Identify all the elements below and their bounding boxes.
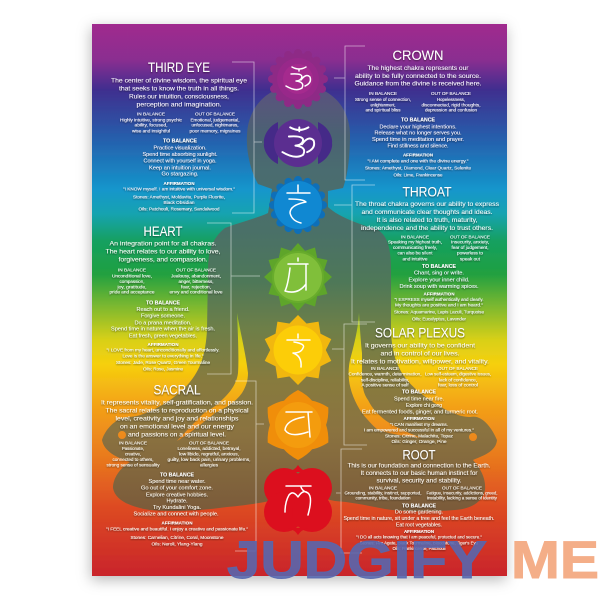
to balance: Eat fresh, green vegetables. — [129, 333, 197, 339]
out of balance: OUT OF BALANCE — [189, 440, 229, 445]
out of balance: low libido, regretful, anxious, — [179, 452, 239, 457]
in balance: strong sense of sensuality — [106, 462, 160, 467]
panel: third eye — [111, 59, 247, 212]
connector: crown bracket — [334, 46, 365, 180]
description: The heart relates to our ability to love, — [106, 249, 221, 256]
description: This is our foundation and connection to the Earth. — [348, 462, 491, 469]
out of balance: Emotional, judgemental, — [190, 117, 240, 122]
in balance — [344, 486, 422, 501]
meditating silhouette — [102, 85, 497, 511]
to balance: Release what no longer serves you. — [374, 131, 462, 137]
in balance: Strong sense of connection, — [355, 97, 411, 102]
affirmation: AFFIRMATION — [404, 529, 434, 534]
affirmation: Oils: Lime, Frankincense — [394, 173, 443, 178]
affirmation — [356, 529, 482, 551]
affirmation — [394, 292, 484, 321]
in balance: wise and insightful — [132, 128, 170, 133]
affirmation: "I KNOW myself. I am intuitive with universal wisdom." — [123, 186, 235, 191]
in balance: can also be silent — [398, 250, 433, 255]
in balance: and intuitive — [402, 256, 428, 261]
affirmation — [123, 181, 235, 212]
description: and communicate clear thoughts and ideas. — [362, 209, 493, 216]
in balance: IN BALANCE — [369, 91, 397, 96]
connector: heart bracket — [207, 223, 260, 374]
heading: root: ROOT — [402, 446, 436, 462]
affirmation: "I LOVE from my heart, unconditionally and effortlessly. — [106, 348, 220, 353]
heading: throat: THROAT — [402, 184, 452, 200]
affirmation: Stones: Carnelian, Citrine, Coral, Moonstone — [130, 535, 224, 540]
description — [101, 399, 253, 438]
to balance: Eat fermented foods, ginger, and turmeric root. — [362, 409, 478, 415]
affirmation: Stones: Jade, Rose Quartz, Green Tourmaline — [116, 360, 210, 365]
affirmation: I am empowered and successful in all of my ventures." — [364, 428, 474, 433]
in balance: enlightenment, — [370, 102, 396, 107]
to balance: Find stillness and silence. — [388, 144, 449, 150]
to balance: Go stargazing. — [162, 172, 199, 178]
description: It is also related to truth, maturity, — [376, 217, 478, 224]
connector: root bracket — [336, 449, 362, 553]
description: perception and imagination. — [136, 101, 222, 108]
affirmation: Oils: Ginger, Orange, Pine — [392, 439, 447, 444]
affirmation — [106, 342, 220, 371]
to balance — [142, 139, 218, 178]
in balance: IN BALANCE — [401, 234, 429, 239]
to balance: TO BALANCE — [401, 117, 435, 123]
affirmation: Stones: Fire Agate, Black Tourmaline, Bloodstone, Tiger's Eye — [360, 541, 478, 546]
affirmation: "I FEEL creative and beautiful. I enjoy a creative and passionate life." — [106, 526, 248, 531]
in balance: community, tribe, foundation — [356, 496, 411, 501]
description: survival, security and stability. — [376, 477, 462, 484]
out of balance — [170, 268, 223, 295]
out of balance: fear, loss of control — [438, 383, 478, 388]
in balance: ability, focused, — [134, 123, 168, 128]
to balance: Spend time near water. — [148, 479, 206, 485]
out of balance: instability, lacking a sense of identity — [427, 496, 498, 501]
to balance: Do some gardening. — [395, 510, 443, 516]
to balance — [111, 300, 215, 339]
affirmation: "I EXPRESS myself authentically and clearly. — [394, 297, 484, 302]
connector: solar plexus bracket — [332, 324, 367, 445]
out of balance: lack of confidence, — [439, 377, 477, 382]
in balance: Unconditional love, — [112, 274, 152, 279]
out of balance: Low self-esteem, digestive issues, — [425, 372, 491, 377]
to balance: TO BALANCE — [402, 389, 436, 395]
description: The highest chakra represents our — [368, 65, 469, 72]
description: It governs our ability to be confident — [365, 342, 475, 349]
to balance: Declare your highest intentions. — [380, 124, 457, 130]
to balance: Eat root vegetables. — [396, 523, 442, 529]
affirmation: Stones: Amethyst, Moldavite, Purple Fluorite, — [133, 194, 225, 199]
to balance: Practice visualization. — [154, 145, 207, 151]
description: An integration point for all chakras. — [110, 241, 217, 248]
watermark: me: ME — [511, 531, 599, 590]
to balance: Spend time in nature when the air is fresh. — [111, 327, 215, 333]
out of balance — [190, 112, 240, 133]
in balance: Confidence, warmth, determination, — [348, 372, 422, 377]
description: on an emotional level and our energy — [120, 423, 235, 430]
out of balance — [426, 486, 498, 501]
affirmation: Stones: Citrine, Malachite, Topaz — [385, 434, 454, 439]
to balance: Reach out to a friend. — [136, 307, 190, 313]
out of balance: Jealousy, abandonment, — [171, 274, 221, 279]
description: and passions on a spiritual level. — [128, 431, 226, 438]
description — [106, 241, 221, 264]
in balance: pride and acceptance — [110, 290, 155, 295]
out of balance: disconnected, rigid thoughts, — [422, 102, 480, 107]
panel: crown — [354, 47, 482, 178]
out of balance: anger, bitterness, — [178, 279, 214, 284]
affirmation: AFFIRMATION — [148, 342, 178, 347]
panel: throat — [355, 184, 499, 321]
heading: sacral: SACRAL — [154, 381, 201, 397]
description: that seeks to know the truth in all things. — [119, 85, 239, 92]
to balance — [344, 504, 495, 529]
description: forgiveness, and compassion. — [118, 257, 208, 264]
affirmation: AFFIRMATION — [162, 520, 192, 525]
in balance: creative, — [125, 452, 141, 457]
out of balance: OUT OF BALANCE — [195, 112, 235, 117]
in balance: compassion, — [120, 279, 144, 284]
affirmation: Oils: Frankincense, Patchouli — [392, 546, 446, 551]
heading: heart: HEART — [144, 223, 183, 239]
icon: heart chakra — [264, 243, 332, 311]
to balance — [400, 264, 479, 290]
in balance: communicating freely, — [393, 245, 437, 250]
out of balance: powerless to — [457, 250, 484, 255]
affirmation — [106, 520, 248, 546]
in balance — [110, 268, 155, 295]
in balance: IN BALANCE — [118, 268, 146, 273]
out of balance — [425, 366, 491, 388]
panel: heart — [106, 223, 223, 371]
to balance: Keep an intuition journal. — [149, 165, 211, 171]
to balance: Spend time in meditation and prayer. — [372, 137, 464, 143]
out of balance: depression and confusion — [425, 108, 478, 113]
to balance: TO BALANCE — [160, 472, 194, 478]
out of balance: OUT OF BALANCE — [431, 91, 471, 96]
affirmation: AFFIRMATION — [404, 416, 434, 421]
in balance: Highly intuitive, strong psychic — [120, 117, 182, 122]
out of balance: allergies — [200, 462, 218, 467]
description — [111, 77, 247, 108]
out of balance: OUT OF BALANCE — [450, 234, 490, 239]
to balance: TO BALANCE — [422, 264, 456, 270]
out of balance: OUT OF BALANCE — [438, 366, 478, 371]
description: independence and the ability to trust others. — [361, 225, 493, 232]
in balance — [355, 91, 411, 113]
in balance: Grounding, stability, instinct, supported, — [344, 491, 422, 496]
to balance: Do a prana meditation. — [134, 320, 192, 326]
out of balance: envy and conditional love — [170, 290, 223, 295]
affirmation: Love is the answer to everything in life." — [122, 353, 204, 358]
description: The throat chakra governs our ability to express — [355, 201, 499, 208]
out of balance — [168, 440, 250, 467]
description: and in control of our lives. — [380, 350, 460, 357]
out of balance — [450, 234, 490, 261]
description: Rules our intuition, consciousness, — [129, 93, 229, 100]
to balance: Drink soup with warming spices. — [400, 284, 479, 290]
affirmation: "I CAN manifest my dreams. — [390, 422, 448, 427]
to balance: Spend time in nature, sit under a tree and feel the Earth beneath. — [344, 516, 495, 522]
icon: sacral chakra — [258, 390, 338, 460]
to balance: Go out of your comfort zone. — [141, 486, 213, 492]
connector: third eye bracket — [232, 62, 262, 213]
to balance: Connect with yourself in yoga. — [144, 159, 217, 165]
connector: throat bracket — [334, 185, 375, 322]
affirmation: Black Obsidian — [164, 200, 195, 205]
out of balance: fear, rejection, — [181, 284, 211, 289]
in balance: Speaking my highest truth, — [388, 240, 442, 245]
in balance: IN BALANCE — [137, 112, 165, 117]
affirmation: AFFIRMATION — [403, 153, 433, 158]
to balance: Chant, sing or write. — [414, 271, 464, 277]
to balance — [134, 472, 219, 517]
in balance: and spiritual bliss — [366, 108, 400, 113]
affirmation: Stones: Amethyst, Diamond, Clear Quartz, Selenite — [365, 165, 471, 170]
in balance — [120, 112, 182, 133]
description: It represents vitality, self-gratification, and passion. — [101, 399, 253, 406]
panel: solar plexus — [348, 325, 491, 444]
to balance: Forgive someone. — [141, 314, 185, 320]
icon: root chakra — [264, 465, 332, 535]
in balance — [106, 440, 160, 467]
affirmation: "I DO all acts knowing that I am peaceful, protected and secure." — [356, 534, 482, 539]
out of balance: Insecurity, anxiety, — [451, 240, 489, 245]
in balance: Passionate, — [122, 446, 144, 451]
affirmation: AFFIRMATION — [164, 181, 194, 186]
out of balance: OUT OF BALANCE — [176, 268, 216, 273]
affirmation: "I AM complete and one with the divine energy." — [368, 158, 469, 163]
to balance: Try Kundalini Yoga. — [153, 505, 201, 511]
watermark: judgify: JUDGIFY — [227, 531, 487, 590]
to balance: TO BALANCE — [402, 504, 436, 510]
panel: sacral — [101, 381, 253, 546]
icon: throat chakra — [273, 180, 323, 230]
affirmation: Oils: Patchouli, Rosemary, Sandalwood — [138, 207, 220, 212]
to balance: Spend time absorbing sunlight. — [142, 152, 218, 158]
out of balance: guilty, low back pain, urinary problems, — [168, 457, 250, 462]
icon: solar plexus chakra — [261, 314, 335, 386]
out of balance: speak out — [460, 256, 481, 261]
affirmation: My thoughts are positive and I am heard." — [395, 303, 483, 308]
in balance: IN BALANCE — [119, 440, 147, 445]
description: It connects to our basic human instinct for — [360, 470, 478, 477]
out of balance: Loneliness, addicted, betrayal, — [178, 446, 240, 451]
affirmation: Oils: Eucalyptus, Lavender — [412, 316, 466, 321]
out of balance: OUT OF BALANCE — [442, 486, 482, 491]
affirmation: Oils: Rose, Jasmine — [143, 366, 183, 371]
description — [354, 65, 482, 88]
affirmation — [364, 416, 474, 444]
out of balance — [422, 91, 480, 113]
in balance: A positive sense of self — [362, 383, 409, 388]
to balance — [372, 117, 464, 150]
to balance: TO BALANCE — [146, 300, 180, 306]
to balance: TO BALANCE — [163, 139, 197, 145]
description — [355, 201, 499, 232]
to balance: Hydrate. — [166, 499, 188, 505]
affirmation — [365, 153, 471, 178]
affirmation: Stones: Aquamarine, Lapis Lazuli, Turquoise — [394, 310, 484, 315]
in balance: IN BALANCE — [371, 366, 399, 371]
icon: third eye chakra — [264, 119, 332, 167]
in balance — [348, 366, 422, 388]
description: It relates to motivation, willpower, and vitality. — [351, 358, 489, 365]
out of balance: poor memory, migraines — [190, 128, 240, 133]
description: The center of divine wisdom, the spiritual eye — [111, 77, 247, 84]
heading: crown: CROWN — [392, 47, 444, 63]
heading: third eye: THIRD EYE — [148, 59, 210, 75]
connector: sacral bracket — [235, 381, 264, 551]
description — [348, 462, 491, 484]
to balance: Socialize and connect with people. — [134, 511, 219, 517]
out of balance: unfocused, nightmares, — [192, 123, 238, 128]
to balance: Spend time near fire. — [394, 396, 444, 402]
in balance: self-discipline, reliability, — [361, 377, 409, 382]
panel: root — [344, 446, 498, 551]
to balance — [362, 389, 478, 415]
heading: solar plexus: SOLAR PLEXUS — [375, 325, 465, 341]
icon: crown chakra — [272, 53, 324, 105]
poster background — [92, 24, 507, 576]
in balance: connected to others, — [112, 457, 154, 462]
affirmation: AFFIRMATION — [424, 292, 454, 297]
to balance: Explore chi gong — [406, 403, 442, 409]
out of balance: Hopelessness, — [437, 97, 465, 102]
in balance: IN BALANCE — [369, 486, 397, 491]
description: The sacral relates to reproduction on a physical — [106, 407, 248, 414]
to balance: Explore your inner child. — [408, 277, 470, 283]
affirmation: Oils: Neroli, Ylang-Ylang — [152, 541, 203, 546]
description: level, creativity and joy and relationships — [116, 415, 238, 422]
out of balance: fear of judgement, — [452, 245, 488, 250]
to balance: Explore creative hobbies. — [146, 492, 208, 498]
description: Guidance from the divine is received here. — [354, 81, 482, 88]
in balance: joy, gratitude, — [116, 284, 146, 289]
out of balance: Fatigue, insecurity, addictions, greed, — [426, 491, 498, 496]
in balance — [388, 234, 442, 261]
watermark — [227, 531, 599, 590]
description: ability to be fully connected to the source. — [355, 73, 481, 80]
description — [351, 342, 489, 365]
